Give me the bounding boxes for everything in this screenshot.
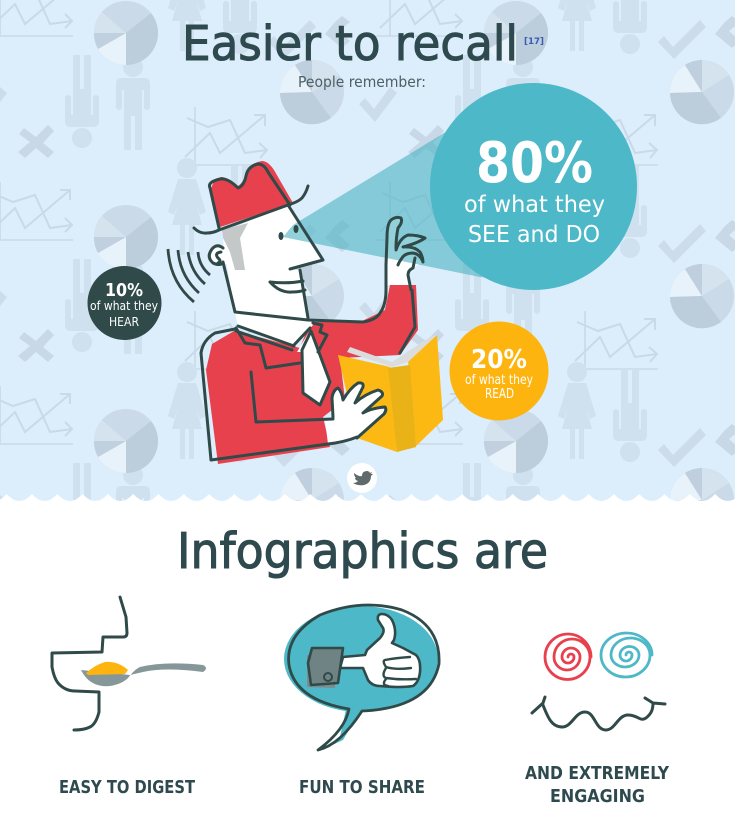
heading: Infographics are — [177, 523, 548, 580]
subtitle: People remember: — [298, 73, 426, 91]
hat fill — [211, 161, 293, 227]
callout: 80 percent: of what they — [464, 192, 605, 218]
sound waves — [168, 249, 210, 302]
tie — [297, 330, 330, 405]
eyes — [278, 225, 298, 240]
label: EASY TO DIGEST — [59, 778, 195, 798]
callout: 10 percent: HEAR — [109, 315, 139, 329]
hair — [222, 223, 248, 270]
label: FUN TO SHARE — [299, 778, 425, 798]
outlines — [194, 164, 425, 460]
face — [222, 205, 323, 320]
title: Easier to recall — [182, 16, 518, 72]
callout: 20 percent: READ — [485, 387, 514, 402]
callout: 10 percent — [88, 266, 162, 340]
citation mark: [17] — [524, 37, 544, 47]
illustration: man reading with hat and book — [168, 105, 520, 464]
spoon — [81, 663, 206, 686]
cuff — [307, 655, 335, 688]
icon: thumbs up speech bubble — [284, 605, 439, 752]
raised hand — [387, 217, 425, 285]
callout: 20 percent: 20% — [471, 345, 527, 375]
shirt collar — [235, 313, 313, 346]
holding hand — [325, 383, 385, 444]
ear — [209, 246, 227, 266]
callout: 80 percent: 80% — [476, 131, 593, 196]
callout: 10 percent: 10% — [105, 280, 143, 301]
callout: 80 percent: SEE and DO — [468, 222, 600, 248]
food — [86, 662, 128, 675]
callout: 20 percent: of what they — [465, 373, 533, 388]
callout: 20 percent — [450, 322, 548, 420]
label: AND EXTREMELY — [525, 764, 669, 784]
jacket and sleeve — [206, 285, 418, 464]
icon: spiral eyes and wavy mouth — [532, 633, 665, 730]
icon: mouth with spoon — [52, 597, 206, 730]
book — [338, 335, 443, 452]
icon: twitter share — [347, 463, 377, 493]
hand — [340, 614, 420, 687]
callout: 10 percent: of what they — [90, 298, 159, 313]
vision cone — [283, 105, 520, 280]
label — [525, 764, 669, 807]
callout: 80 percent — [430, 83, 637, 290]
label: ENGAGING — [550, 787, 645, 807]
